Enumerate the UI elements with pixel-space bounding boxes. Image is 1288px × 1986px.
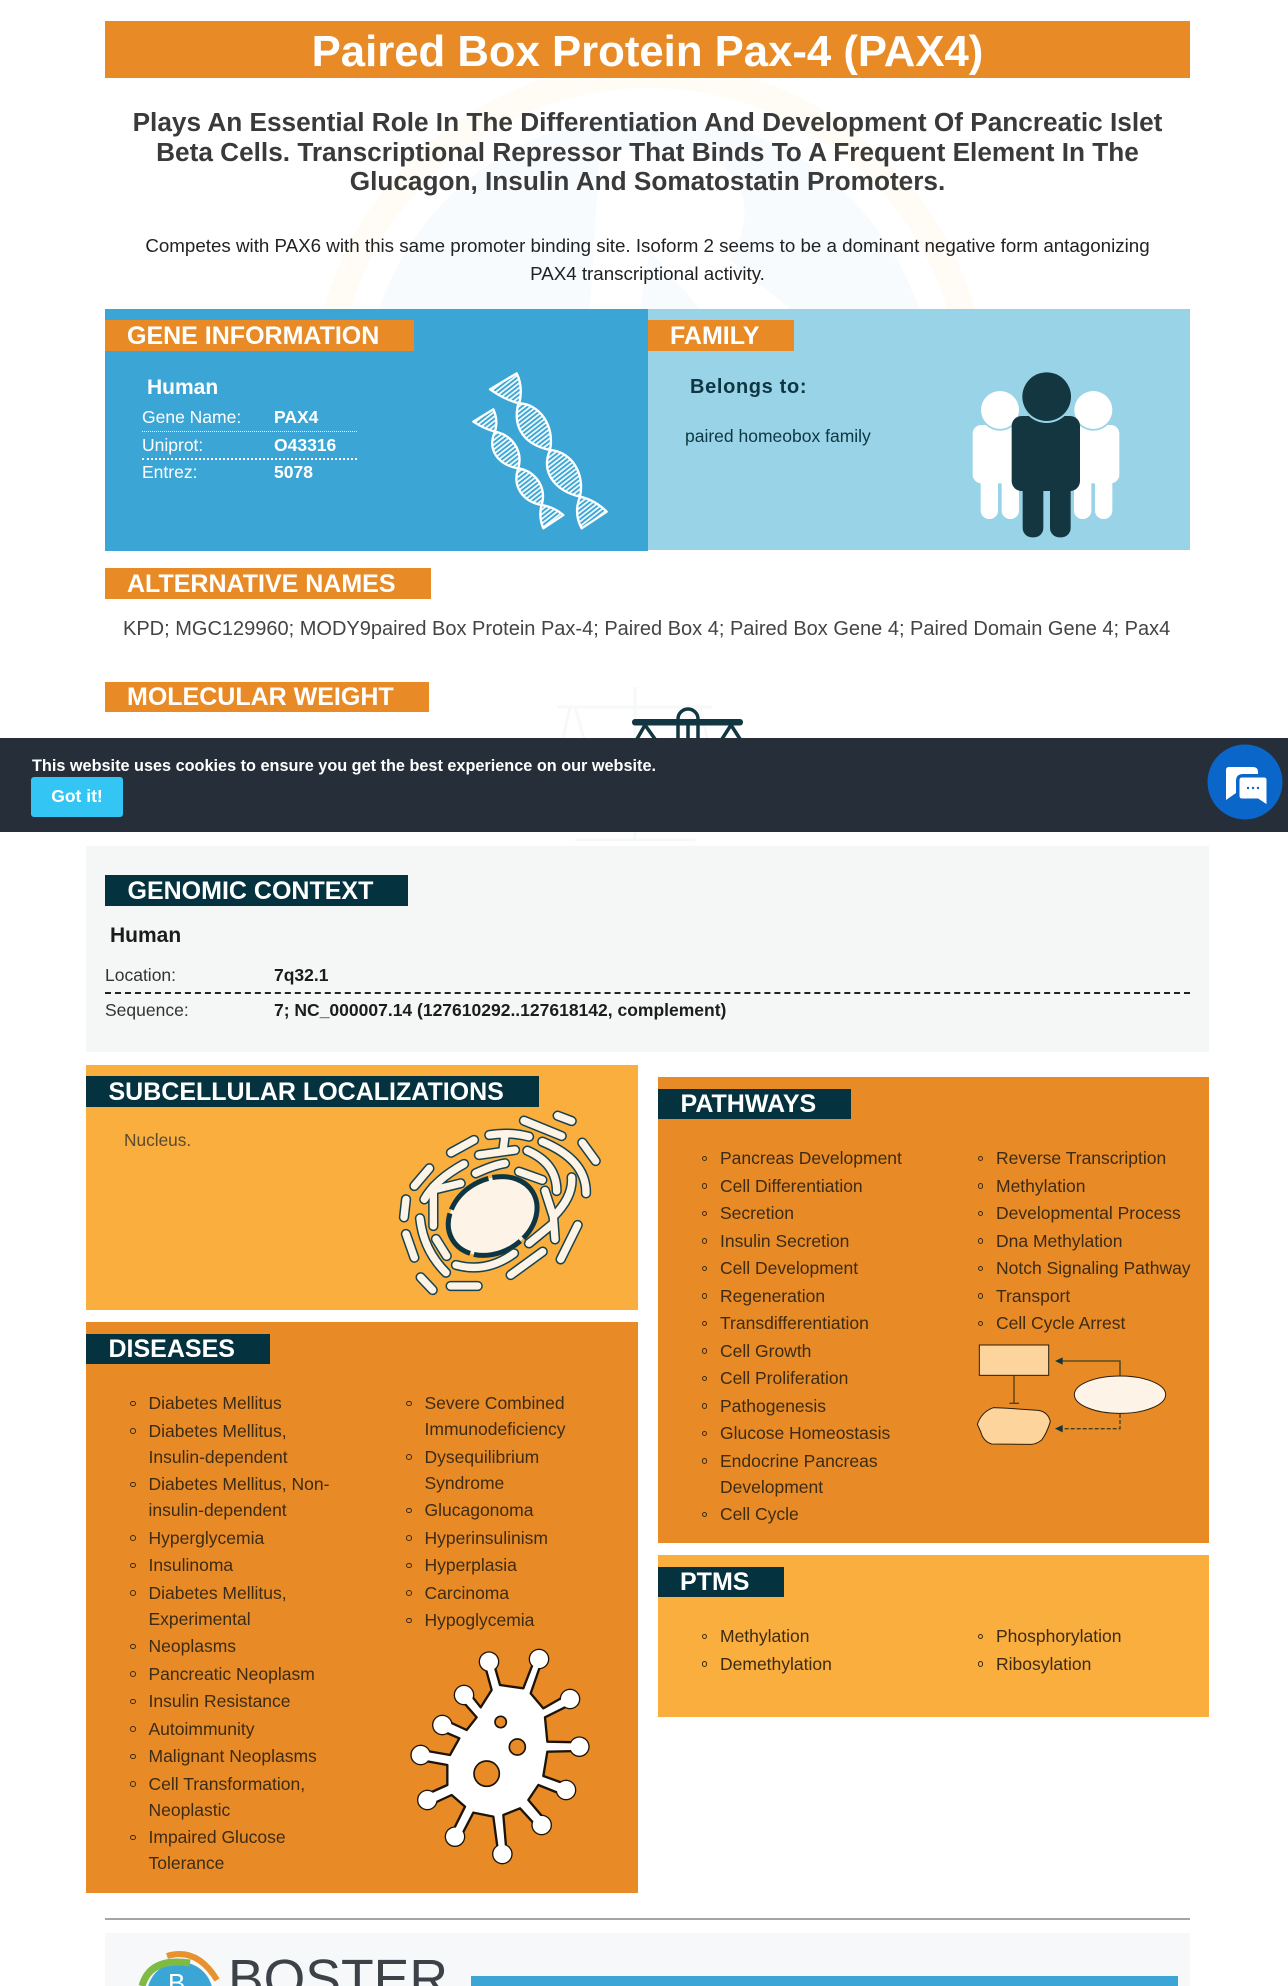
- description paragraph: Competes with PAX6 with this same promoter binding site. Isoform 2 seems to be a dominant negative form antagonizing: [145, 234, 1150, 256]
- pathway list column 1: Pathogenesis: [720, 1396, 826, 1416]
- description paragraph: PAX4 transcriptional activity.: [530, 263, 765, 284]
- panel: pathways: [658, 1077, 1209, 1543]
- pathway list column 2: Notch Signaling Pathway: [996, 1258, 1191, 1278]
- disease list column 1: Insulinoma: [148, 1555, 233, 1575]
- disease list column 2: Glucagonoma: [424, 1500, 533, 1520]
- disease list column 1: Insulin-dependent: [148, 1446, 288, 1466]
- pathway list column 1: Cell Differentiation: [720, 1176, 863, 1196]
- family name: paired homeobox family: [685, 426, 871, 446]
- panel: family: [648, 309, 1190, 550]
- alternative names text: KPD; MGC129960; MODY9paired Box Protein Pax-4; Paired Box 4; Paired Box Gene 4; Paired Domain Gene 4; Pax4: [123, 618, 1170, 640]
- watermark logo: [324, 78, 974, 309]
- location row: 7q32.1: [274, 965, 328, 985]
- disease list column 1: Pancreatic Neoplasm: [148, 1664, 315, 1684]
- heading: genomic context: GENOMIC CONTEXT: [128, 877, 373, 905]
- disease list column 1: Diabetes Mellitus,: [148, 1582, 287, 1602]
- title banner: Paired Box Protein Pax-4 (PAX4): [312, 27, 983, 76]
- heading: molecular weight: MOLECULAR WEIGHT: [127, 683, 394, 711]
- pathway list column 1: Glucose Homeostasis: [720, 1423, 890, 1443]
- icon: pathway diagram: [976, 1344, 1166, 1445]
- disease list column 1: insulin-dependent: [148, 1500, 287, 1520]
- pathway list column 1: Transdifferentiation: [720, 1313, 869, 1333]
- sequence row: Sequence:: [105, 1000, 189, 1020]
- disease list column 1: Autoimmunity: [148, 1718, 255, 1738]
- cookie banner: [0, 738, 1288, 832]
- panel: diseases: [86, 1322, 638, 1893]
- disease list column 1: Diabetes Mellitus,: [148, 1420, 287, 1440]
- pathway list column 1: Insulin Secretion: [720, 1230, 849, 1250]
- cookie message: This website uses cookies to ensure you get the best experience on our website.: [32, 757, 656, 775]
- icon: DNA helix: [472, 372, 608, 530]
- pathway list column 2: Cell Cycle Arrest: [996, 1313, 1125, 1333]
- heading: PTMs: PTMS: [680, 1568, 749, 1596]
- gene data table: O43316: [274, 435, 336, 455]
- disease list column 2: [406, 1393, 566, 1630]
- disease list column 2: Carcinoma: [424, 1582, 509, 1602]
- disease list column 1: Cell Transformation,: [148, 1774, 305, 1794]
- cookie button: [31, 777, 123, 817]
- pathway list column 1: Development: [720, 1476, 823, 1496]
- location row: [105, 965, 328, 985]
- disease list column 2: Dysequilibrium: [424, 1446, 539, 1466]
- pathway list column 2: Reverse Transcription: [996, 1148, 1166, 1168]
- subtitle heading: [133, 107, 1162, 196]
- pathway list column 2: [978, 1148, 1191, 1333]
- heading: diseases: DISEASES: [108, 1335, 235, 1363]
- heading: PTMs: [658, 1567, 784, 1597]
- disease list column 1: Neoplastic: [148, 1800, 230, 1820]
- pathway list column 2: Methylation: [996, 1176, 1086, 1196]
- subtitle heading: Plays An Essential Role In The Differentiation And Development Of Pancreatic Islet: [133, 107, 1162, 137]
- PTM list column 1: Demethylation: [720, 1654, 832, 1674]
- localization text: Nucleus.: [124, 1130, 191, 1150]
- disease list column 1: Diabetes Mellitus, Non-: [148, 1474, 329, 1494]
- PTM list column 1: Methylation: [720, 1626, 810, 1646]
- disease list column 2: Hypoglycemia: [424, 1610, 534, 1630]
- pathway list column 1: Cell Proliferation: [720, 1368, 848, 1388]
- heading: pathways: [658, 1089, 851, 1119]
- panel: PTMs: [658, 1555, 1209, 1717]
- watermark: faint balance: [550, 685, 720, 845]
- pathway list column 1: [702, 1148, 902, 1524]
- gene data table: 5078: [274, 462, 313, 482]
- pathway list column 1: Regeneration: [720, 1286, 825, 1306]
- icon: virus: [410, 1648, 590, 1864]
- sequence row: 7; NC_000007.14 (127610292..127618142, complement): [274, 1000, 726, 1020]
- footer divider: [105, 1918, 1190, 1920]
- disease list column 1: [130, 1393, 329, 1873]
- PTM list column 2: [978, 1626, 1122, 1674]
- gene data table: Uniprot:: [142, 435, 203, 455]
- pathway list column 1: Endocrine Pancreas: [720, 1450, 878, 1470]
- gene data table: Gene Name:: [142, 407, 241, 427]
- species label: Human: [110, 924, 181, 947]
- disease list column 1: Impaired Glucose: [148, 1827, 286, 1847]
- pathway list column 1: Cell Growth: [720, 1340, 811, 1360]
- disease list column 2: Immunodeficiency: [424, 1419, 566, 1439]
- disease list column 1: Tolerance: [148, 1853, 224, 1873]
- disease list column 2: Hyperplasia: [424, 1555, 517, 1575]
- PTM list column 1: [702, 1626, 832, 1674]
- disease list column 1: Neoplasms: [148, 1636, 236, 1656]
- pathway list column 2: Transport: [996, 1286, 1070, 1306]
- heading: alternative names: ALTERNATIVE NAMES: [127, 570, 396, 598]
- heading: subcellular localizations: SUBCELLULAR LOCALIZATIONS: [108, 1078, 504, 1106]
- PTM list column 2: Phosphorylation: [996, 1626, 1122, 1646]
- cookie button: Got it!: [51, 786, 103, 806]
- panel: gene information: [105, 309, 648, 551]
- gene data table: [142, 407, 357, 482]
- panel: subcellular localizations: [86, 1065, 638, 1310]
- species label: Human: [147, 376, 218, 398]
- disease list column 2: Hyperinsulinism: [424, 1528, 548, 1548]
- panel: footer: [105, 1933, 1190, 1986]
- disease list column 2: Syndrome: [424, 1472, 504, 1492]
- pathway list column 2: Developmental Process: [996, 1203, 1181, 1223]
- disease list column 2: Severe Combined: [424, 1393, 565, 1413]
- heading: diseases: [86, 1334, 270, 1364]
- icon: balance scale: [632, 707, 743, 738]
- gene data table: PAX4: [274, 407, 318, 427]
- belongs to label: Belongs to:: [690, 376, 807, 398]
- pathway list column 1: Cell Cycle: [720, 1504, 799, 1524]
- disease list column 1: Hyperglycemia: [148, 1528, 264, 1548]
- location row: Location:: [105, 965, 176, 985]
- heading: pathways: PATHWAYS: [680, 1090, 816, 1118]
- PTM list column 2: Ribosylation: [996, 1654, 1091, 1674]
- heading: family: [648, 320, 794, 351]
- pathway list column 2: Dna Methylation: [996, 1230, 1122, 1250]
- heading: gene information: GENE INFORMATION: [127, 322, 379, 350]
- icon: group of people: [972, 372, 1120, 538]
- icon: nucleus and endoplasmic reticulum: [398, 1110, 601, 1296]
- disease list column 1: Experimental: [148, 1608, 251, 1628]
- blue footer bar: [471, 1976, 1178, 1986]
- pathway list column 1: Secretion: [720, 1203, 794, 1223]
- description paragraph: [145, 234, 1150, 284]
- title banner: [105, 21, 1190, 78]
- disease list column 1: Diabetes Mellitus: [148, 1393, 282, 1413]
- gene data table: Entrez:: [142, 462, 197, 482]
- pathway list column 1: Cell Development: [720, 1258, 858, 1278]
- panel: genomic context: [86, 846, 1209, 1052]
- disease list column 1: Insulin Resistance: [148, 1691, 291, 1711]
- pathway list column 1: Pancreas Development: [720, 1148, 902, 1168]
- icon: chat button: [1208, 744, 1282, 820]
- subtitle heading: Beta Cells. Transcriptional Repressor That Binds To A Frequent Element In The: [156, 136, 1139, 166]
- disease list column 1: Malignant Neoplasms: [148, 1746, 317, 1766]
- subtitle heading: Glucagon, Insulin And Somatostatin Promoters.: [350, 166, 945, 196]
- heading: family: FAMILY: [670, 322, 759, 350]
